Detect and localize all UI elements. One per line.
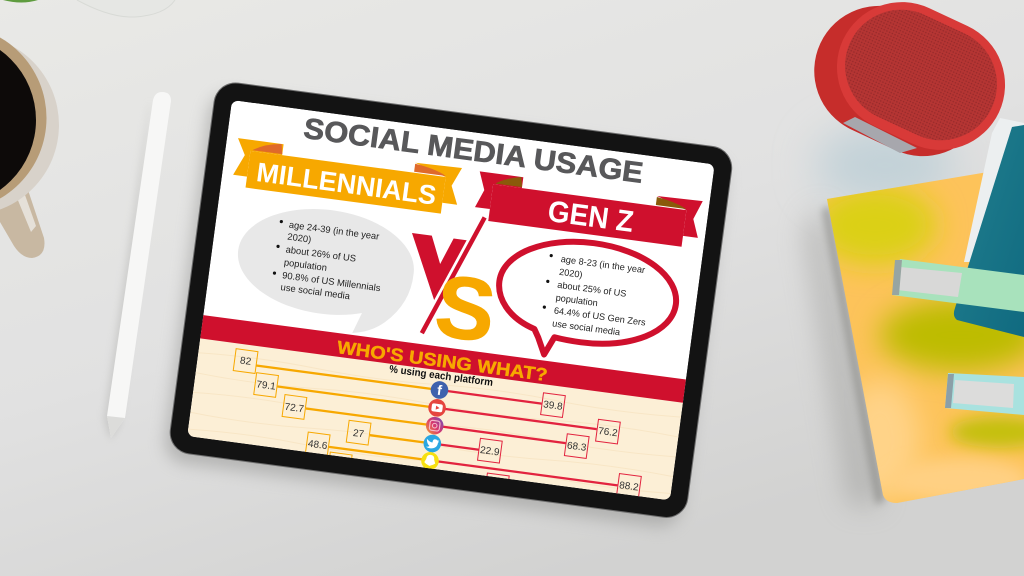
highlighter: aqua bbox=[945, 373, 1024, 415]
gen z banner: GEN Z bbox=[546, 195, 635, 239]
speech bubble: millennials bbox=[238, 209, 414, 333]
speech bubble: millennials: age 24-39 (in the year bbox=[288, 219, 380, 242]
speech bubble: gen z: 64.4% of US Gen Zers bbox=[553, 305, 647, 328]
speech bubble: gen z: use social media bbox=[552, 318, 622, 337]
gen z numbers: 88.2 bbox=[618, 480, 640, 494]
icon: facebook bbox=[430, 381, 448, 399]
infographic screen bbox=[185, 100, 715, 519]
glass at top edge bbox=[77, 0, 175, 17]
tablet bbox=[167, 80, 735, 522]
coffee cup bbox=[0, 25, 59, 258]
millennials numbers: 48.6 bbox=[307, 439, 328, 452]
section band: WHO'S USING WHAT? bbox=[336, 337, 549, 385]
gen z numbers bbox=[480, 400, 638, 490]
speech bubble: millennials: 90.8% of US Millennials bbox=[282, 269, 382, 293]
chart: millennials values bbox=[232, 348, 431, 460]
section band bbox=[200, 315, 686, 403]
speech bubble: millennials: population bbox=[283, 256, 328, 273]
speech bubble: gen z: population bbox=[555, 293, 598, 308]
gen z numbers: 68.3 bbox=[566, 440, 587, 454]
icon: twitter bbox=[424, 434, 442, 452]
millennials numbers: 79.1 bbox=[256, 379, 277, 393]
speech bubble: millennials: use social media bbox=[280, 281, 351, 301]
chart subtitle: % using each platform bbox=[388, 363, 494, 389]
millennials numbers: 72.7 bbox=[284, 402, 305, 415]
red speaker bbox=[793, 0, 1024, 178]
millennials numbers: 82 bbox=[239, 355, 252, 368]
icon: instagram bbox=[426, 416, 444, 434]
tablet shadow bbox=[162, 91, 728, 530]
gen z numbers: 22.9 bbox=[479, 445, 501, 458]
gen z numbers: 76.2 bbox=[597, 426, 619, 439]
millennials numbers bbox=[240, 356, 364, 449]
speech bubble: gen z: age 8-23 (in the year bbox=[560, 254, 646, 275]
millennials banner bbox=[232, 138, 462, 216]
highlighter: green bbox=[892, 259, 1024, 312]
teal book bbox=[954, 118, 1024, 337]
chart: gen z values bbox=[438, 390, 642, 496]
speech bubble: gen z: 2020) bbox=[558, 267, 583, 280]
versus mark bbox=[412, 216, 492, 340]
speech bubble: gen z bbox=[496, 238, 680, 358]
gen z banner bbox=[473, 171, 703, 249]
speech bubble: millennials: 2020) bbox=[287, 231, 312, 245]
speech bubble: gen z: about 25% of US bbox=[557, 280, 627, 299]
millennials banner: MILLENNIALS bbox=[255, 157, 438, 211]
millennials numbers: 27 bbox=[352, 428, 365, 440]
stylus pencil bbox=[104, 92, 171, 440]
icon: youtube bbox=[428, 399, 446, 417]
icon: snapchat bbox=[421, 452, 439, 469]
gen z numbers: 39.8 bbox=[542, 399, 564, 413]
versus mark: S bbox=[430, 255, 501, 361]
soft desk shadows bbox=[805, 125, 955, 505]
title: SOCIAL MEDIA USAGE bbox=[302, 113, 645, 190]
icon: facebook: f bbox=[436, 382, 443, 398]
plant leaf bbox=[3, 0, 38, 2]
speech bubble: millennials: about 26% of US bbox=[285, 243, 357, 264]
notebook bbox=[813, 165, 1024, 503]
